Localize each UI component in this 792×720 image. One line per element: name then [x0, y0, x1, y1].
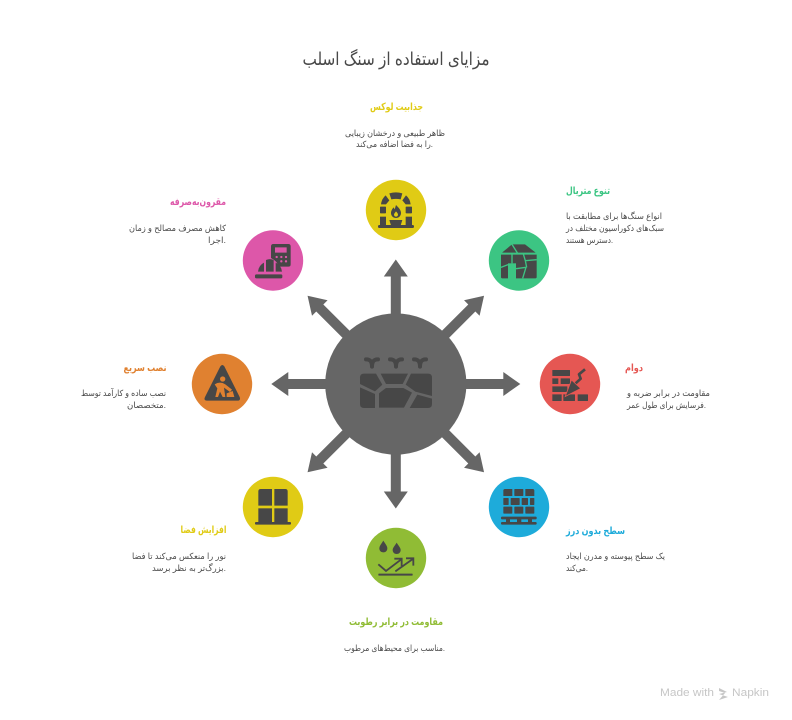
description	[129, 223, 227, 245]
description: فرسایش برای طول عمر.	[626, 400, 706, 410]
description: می‌کند.	[566, 563, 588, 573]
central hub with eight arrows	[271, 260, 520, 508]
icon: cracked slate stone with sprouts	[360, 359, 432, 408]
panel: quick installation (left)	[81, 354, 252, 414]
icon circle: fireplace	[366, 180, 426, 240]
panel: moisture resistance (bottom)	[344, 528, 445, 653]
description: مقاومت در برابر ضربه و	[626, 388, 710, 398]
description	[345, 128, 445, 149]
heading: افزایش فضا	[180, 525, 226, 536]
footer: made with napkin	[660, 687, 769, 700]
description: سبک‌های دکوراسیون مختلف در	[565, 223, 664, 233]
panel: durability (right)	[540, 354, 710, 414]
description: انواع سنگ‌ها برای مطابقت با	[566, 211, 662, 221]
description: کاهش مصرف مصالح و زمان	[129, 223, 227, 233]
footer: made with napkin: Napkin	[732, 687, 769, 699]
description: اجرا.	[208, 235, 226, 245]
icon circle: calculator and hard hat	[243, 230, 303, 291]
panel: increased space (lower left)	[132, 477, 303, 573]
heading: نصب سریع	[124, 363, 166, 374]
heading: مقرون‌به‌صرفه	[170, 197, 226, 208]
description	[81, 387, 166, 410]
description: دسترس هستند.	[566, 235, 613, 245]
description: مناسب برای محیط‌های مرطوب.	[344, 643, 445, 653]
description: بزرگ‌تر به نظر برسد.	[152, 563, 226, 573]
heading: جذابیت لوکس	[370, 102, 423, 113]
description: نور را منعکس می‌کند تا فضا	[132, 551, 226, 561]
panel: luxury appeal (top)	[345, 102, 445, 240]
heading: سطح بدون درز	[565, 526, 625, 537]
panel: seamless surface (lower right)	[489, 477, 666, 573]
description: ظاهر طبیعی و درخشان زیبایی	[345, 128, 445, 138]
hub circle	[325, 313, 466, 455]
icon circle: tile grid	[489, 477, 549, 537]
heading: مقاومت در برابر رطوبت	[349, 617, 443, 628]
title: مزایای استفاده از سنگ اسلب	[302, 48, 490, 70]
description	[565, 211, 664, 245]
arrows radiating from hub	[271, 260, 520, 508]
panel: cost effectiveness (upper left)	[129, 197, 303, 291]
description	[566, 551, 666, 573]
description: نصب ساده و کارآمد توسط	[81, 387, 166, 398]
heading: تنوع متریال	[566, 186, 610, 197]
description: را به فضا اضافه می‌کند.	[356, 139, 433, 149]
panel: material variety (upper right)	[489, 186, 664, 291]
description: متخصصان.	[127, 400, 166, 410]
footer: made with napkin: Made with	[660, 687, 714, 699]
description	[626, 388, 710, 410]
icon: napkin logo	[719, 688, 728, 700]
icon circle: brick wall and trowel	[540, 354, 600, 414]
description	[132, 551, 226, 573]
heading: دوام	[625, 363, 643, 374]
icon circle: stone house	[489, 230, 549, 291]
icon circle: worker warning sign	[192, 354, 252, 414]
icon circle: window	[243, 477, 303, 537]
icon circle: water drops and rising arrows	[366, 528, 426, 588]
description: یک سطح پیوسته و مدرن ایجاد	[566, 551, 666, 561]
